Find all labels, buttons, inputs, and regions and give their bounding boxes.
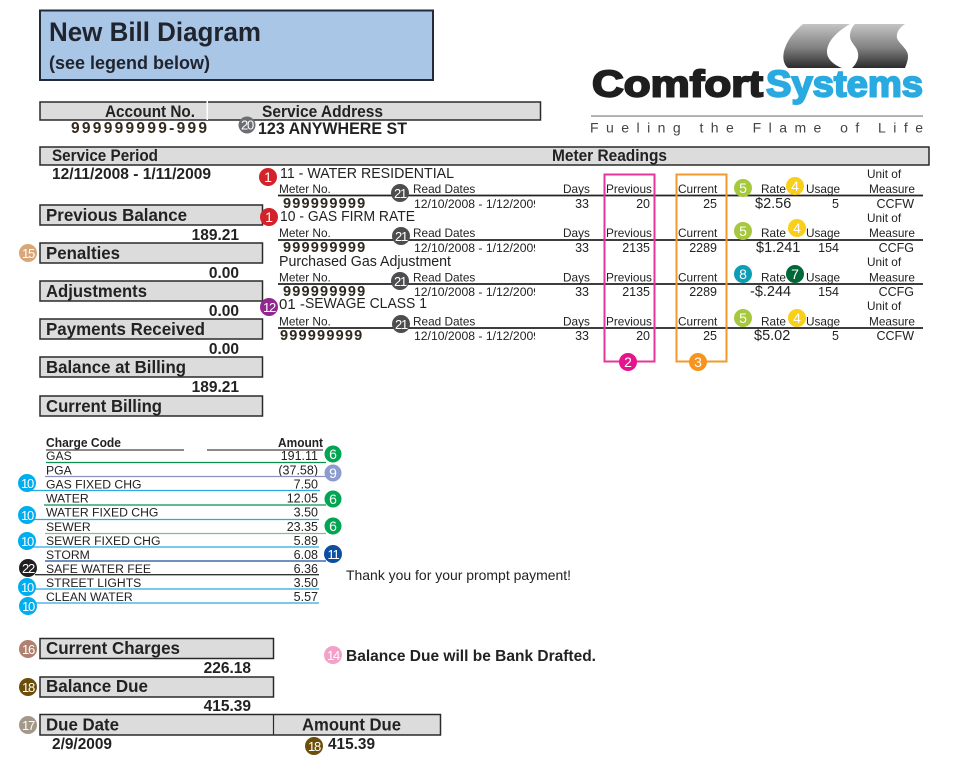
- account number: 999999999-999: [71, 120, 207, 137]
- charges table: WATER: [46, 492, 89, 506]
- panel: balance due: 415.39: [204, 698, 251, 715]
- meter row: water residential: 5: [832, 197, 839, 211]
- charges table: 3.50: [294, 506, 318, 520]
- meter row: sewage class: Measure: [869, 314, 915, 328]
- badge 16: [19, 640, 37, 658]
- badges: read dates 21: 21: [394, 186, 407, 201]
- meter row: purchased gas adjustment: 2135: [622, 285, 650, 299]
- meter row: gas firm rate: 12/10/2008 - 1/12/2009: [414, 241, 540, 255]
- charges table: 6.08: [294, 548, 318, 562]
- charges table: 7.50: [294, 478, 318, 492]
- meter row: water residential: 33: [575, 197, 589, 211]
- logo wordmark: Comfort: [592, 64, 763, 104]
- charges table: (37.58): [278, 464, 318, 478]
- charges table: Amount: [278, 436, 324, 450]
- meter row: water residential: Usage: [806, 182, 841, 196]
- bank draft note: 14: [327, 648, 340, 663]
- badges: rate and usage legend markers: 5: [739, 310, 747, 326]
- highlight: previous column: [604, 174, 654, 362]
- panel: current charges: [40, 638, 274, 677]
- meter row: gas firm rate: $1.241: [756, 240, 800, 256]
- badge 18 balance: 18: [22, 680, 35, 695]
- badge 3: [689, 353, 707, 371]
- meter row: sewage class: 01 -: [279, 296, 305, 313]
- badges: read dates 21: 21: [394, 274, 407, 289]
- badges: charges legend markers: 9: [329, 465, 337, 481]
- charges table: 191.11: [281, 449, 318, 463]
- logo: Comfort Systems: [590, 24, 923, 136]
- charges table: GAS: [46, 449, 72, 463]
- charges table: 12.05: [287, 492, 318, 506]
- meter row: sewage class: Unit of: [867, 299, 902, 313]
- meter row: water residential: 12/10/2008 - 1/12/2009: [414, 197, 540, 211]
- meter row: gas firm rate: Previous: [606, 226, 652, 240]
- meter row: purchased gas adjustment: 33: [575, 285, 589, 299]
- badges: charges legend markers: 10: [21, 476, 34, 491]
- meter row: purchased gas adjustment: Rate: [761, 270, 786, 284]
- charges table: STREET LIGHTS: [46, 576, 141, 590]
- meter row: gas firm rate: 999999999: [283, 240, 366, 256]
- charges table: CLEAN WATER: [46, 590, 133, 604]
- charges table: 5.57: [294, 590, 318, 604]
- badges: charges legend markers: 10: [21, 508, 34, 523]
- service and meter header bar: Service Period: [52, 147, 158, 165]
- badge 2: [619, 353, 637, 371]
- meter row: gas firm rate: Measure: [869, 226, 915, 240]
- badge 1 water: [259, 168, 277, 186]
- meter row: purchased gas adjustment: 2289: [689, 285, 717, 299]
- charges table: SEWER FIXED CHG: [46, 534, 160, 548]
- meter row: purchased gas adjustment: Unit of: [867, 255, 902, 269]
- meter row: sewage class: Usage: [806, 314, 841, 328]
- meter row: sewage class: Rate: [761, 314, 786, 328]
- logo icon: flame swooshes: [783, 24, 908, 68]
- badges: charges legend markers: 22: [22, 561, 35, 576]
- panel: account summary: Current Billing: [46, 396, 162, 416]
- meter row: sewage class: 12/10/2008 - 1/12/2009: [414, 329, 540, 343]
- meter row: purchased gas adjustment: Previous: [606, 270, 652, 284]
- meter row: water residential: 11 - WATER RESIDENTIAL: [280, 165, 454, 182]
- meter row: gas firm rate: Current: [678, 226, 718, 240]
- meter row: water residential: Unit of: [867, 167, 902, 181]
- meter row: sewage class: [278, 298, 923, 342]
- title panel: [40, 10, 433, 80]
- meter row: gas firm rate: Meter No.: [279, 226, 331, 240]
- meter row: gas firm rate: Usage: [806, 226, 841, 240]
- panel: balance due: [40, 676, 274, 715]
- meter row: water residential: CCFW: [876, 197, 914, 211]
- meter row: sewage class: CCFW: [876, 329, 914, 343]
- badges: charges legend markers: 6: [329, 491, 337, 507]
- badges: charges legend markers: 6: [329, 518, 337, 534]
- badges: charges legend markers: 10: [21, 534, 34, 549]
- badge 16: 16: [22, 642, 35, 657]
- badge 17: [19, 716, 37, 734]
- panel: balance due: Balance Due: [46, 676, 148, 696]
- badges: rate and usage legend markers: 4: [793, 310, 801, 326]
- charges table: 6.36: [294, 562, 318, 576]
- badge 20: 20: [241, 118, 254, 132]
- charges table: WATER FIXED CHG: [46, 506, 158, 520]
- badges: charges legend markers: 11: [327, 547, 340, 562]
- meter row: purchased gas adjustment: [278, 253, 923, 300]
- badges: rate and usage legend markers: [734, 177, 806, 327]
- meter row: water residential: Days: [563, 182, 590, 196]
- charges table: GAS FIXED CHG: [46, 478, 141, 492]
- badges: charges legend markers: [18, 446, 342, 615]
- panel: account summary: 189.21: [192, 227, 239, 244]
- service and meter header bar: [40, 147, 929, 165]
- badge 18 amount: 18: [308, 739, 321, 754]
- badge 20: [238, 116, 256, 134]
- meter row: purchased gas adjustment: Current: [678, 270, 718, 284]
- panel: current charges: Current Charges: [46, 638, 180, 658]
- panel: due date and amount due: 2/9/2009: [52, 736, 112, 753]
- badge 18 balance: [19, 678, 37, 696]
- badge 3: 3: [694, 354, 702, 370]
- charges table: 23.35: [287, 520, 318, 534]
- account bar: Account No.: [105, 103, 195, 121]
- badges: read dates 21: 21: [395, 317, 408, 332]
- meter row: sewage class: Previous: [606, 314, 652, 328]
- charges table: [30, 436, 326, 604]
- meter row: water residential: Current: [678, 182, 718, 196]
- badge 1 gas: 1: [265, 209, 273, 225]
- logo wordmark: [592, 64, 923, 104]
- badges: rate and usage legend markers: 4: [793, 220, 801, 236]
- meter row: water residential: 999999999: [283, 196, 366, 212]
- panel: due date and amount due: Amount Due: [302, 714, 401, 734]
- meter row: sewage class: 20: [636, 329, 650, 343]
- subtitle: (see legend below): [49, 52, 210, 73]
- panel: account summary: 0.00: [209, 341, 239, 358]
- meter row: gas firm rate: 33: [575, 241, 589, 255]
- meter row: gas firm rate: [278, 211, 923, 254]
- logo wordmark: Systems: [766, 64, 923, 104]
- charges table: SAFE WATER FEE: [46, 562, 151, 576]
- charges table: 5.89: [294, 534, 318, 548]
- meter row: purchased gas adjustment: CCFG: [879, 285, 914, 299]
- account bar: [40, 101, 540, 121]
- badge 17: 17: [22, 718, 35, 733]
- badge 1 gas: [260, 208, 278, 226]
- logo tagline: Fueling the Flame of Life: [590, 120, 923, 136]
- meter row: sewage class: Read Dates: [413, 314, 475, 328]
- badge 1 water: 1: [264, 169, 272, 185]
- meter row: sewage class: 25: [703, 329, 717, 343]
- meter row: purchased gas adjustment: 12/10/2008 - 1/12/2009: [414, 285, 540, 299]
- meter row: purchased gas adjustment: 999999999: [283, 284, 366, 300]
- meter row: gas firm rate: Days: [563, 226, 590, 240]
- badge 12: [260, 298, 278, 316]
- badge 12: 12: [263, 300, 276, 315]
- meter row: purchased gas adjustment: Purchased Gas Adjustment: [279, 253, 452, 270]
- meter row: sewage class: Meter No.: [279, 314, 331, 328]
- meter row: purchased gas adjustment: Meter No.: [279, 270, 331, 284]
- badges: charges legend markers: 10: [22, 599, 35, 614]
- charges table: 3.50: [294, 576, 318, 590]
- meter row: sewage class: SEWAGE CLASS 1: [305, 295, 427, 312]
- thank you note: Thank you for your prompt payment!: [346, 567, 571, 583]
- highlight: current column: [676, 174, 726, 362]
- badge 15: 15: [22, 246, 35, 261]
- charges table: PGA: [46, 464, 73, 478]
- panel: due date and amount due: Due Date: [46, 714, 119, 734]
- panel: account summary: Previous Balance: [46, 205, 187, 225]
- meter row: gas firm rate: 154: [818, 241, 839, 255]
- meter row: gas firm rate: 10 - GAS FIRM RATE: [280, 208, 415, 225]
- meter row: gas firm rate: 2135: [622, 241, 650, 255]
- panel: due date and amount due: 415.39: [328, 736, 375, 753]
- meter row: sewage class: Days: [563, 314, 590, 328]
- badge 15: [19, 244, 37, 262]
- meter row: sewage class: 5: [832, 329, 839, 343]
- panel: account summary: 0.00: [209, 303, 239, 320]
- meter row: sewage class: $5.02: [754, 328, 790, 344]
- charges table: STORM: [46, 548, 90, 562]
- service and meter header bar: Meter Readings: [552, 147, 667, 165]
- meter row: purchased gas adjustment: Days: [563, 270, 590, 284]
- panel: account summary: Balance at Billing: [46, 357, 186, 377]
- meter row: water residential: 20: [636, 197, 650, 211]
- panel: account summary: Adjustments: [46, 281, 147, 301]
- service address value: 123 ANYWHERE ST: [258, 119, 408, 138]
- meter row: gas firm rate: CCFG: [879, 241, 914, 255]
- panel: account summary: Payments Received: [46, 319, 205, 339]
- badge 2: 2: [624, 354, 632, 370]
- badges: charges legend markers: 6: [329, 446, 337, 462]
- meter row: water residential: Read Dates: [413, 182, 475, 196]
- bank draft note: Balance Due will be Bank Drafted.: [346, 648, 596, 665]
- badges: rate and usage legend markers: 4: [791, 178, 799, 194]
- panel: account summary: 189.21: [192, 379, 239, 396]
- service period dates: 12/11/2008 - 1/11/2009: [52, 166, 211, 183]
- badges: read dates 21: 21: [395, 229, 408, 244]
- meter row: gas firm rate: Unit of: [867, 211, 902, 225]
- meter row: water residential: Rate: [761, 182, 786, 196]
- badge 18 amount: [305, 737, 323, 755]
- charges table: SEWER: [46, 520, 91, 534]
- meter row: water residential: Meter No.: [279, 182, 331, 196]
- meter row: water residential: Previous: [606, 182, 652, 196]
- title: New Bill Diagram: [49, 17, 261, 47]
- meter row: purchased gas adjustment: Read Dates: [413, 270, 475, 284]
- meter row: water residential: 25: [703, 197, 717, 211]
- panel: current charges: 226.18: [204, 660, 251, 677]
- meter row: purchased gas adjustment: 154: [818, 285, 839, 299]
- badges: rate and usage legend markers: 5: [739, 223, 747, 239]
- meter row: gas firm rate: 2289: [689, 241, 717, 255]
- meter row: sewage class: Current: [678, 314, 718, 328]
- badges: rate and usage legend markers: 7: [791, 266, 799, 282]
- meter row: sewage class: 999999999: [280, 328, 363, 344]
- meter row: purchased gas adjustment: Measure: [869, 270, 915, 284]
- meter row: water residential: Measure: [869, 182, 915, 196]
- panel: due date and amount due: [40, 714, 440, 753]
- meter row: sewage class: 33: [575, 329, 589, 343]
- meter row: water residential: $2.56: [755, 196, 791, 212]
- meter row: purchased gas adjustment: -$.244: [750, 284, 791, 300]
- badges: read dates 21: [391, 184, 410, 333]
- badges: rate and usage legend markers: 8: [739, 266, 747, 282]
- panel: account summary: Penalties: [46, 243, 120, 263]
- charges table: Charge Code: [46, 436, 121, 450]
- meter row: gas firm rate: Read Dates: [413, 226, 475, 240]
- meter row: purchased gas adjustment: Usage: [806, 270, 841, 284]
- panel: account summary: [40, 205, 262, 416]
- meter row: water residential: [278, 168, 923, 210]
- panel: account summary: 0.00: [209, 265, 239, 282]
- badges: rate and usage legend markers: 5: [739, 180, 747, 196]
- meter row: gas firm rate: Rate: [761, 226, 786, 240]
- account bar: Service Address: [262, 103, 383, 121]
- badges: charges legend markers: 10: [21, 580, 34, 595]
